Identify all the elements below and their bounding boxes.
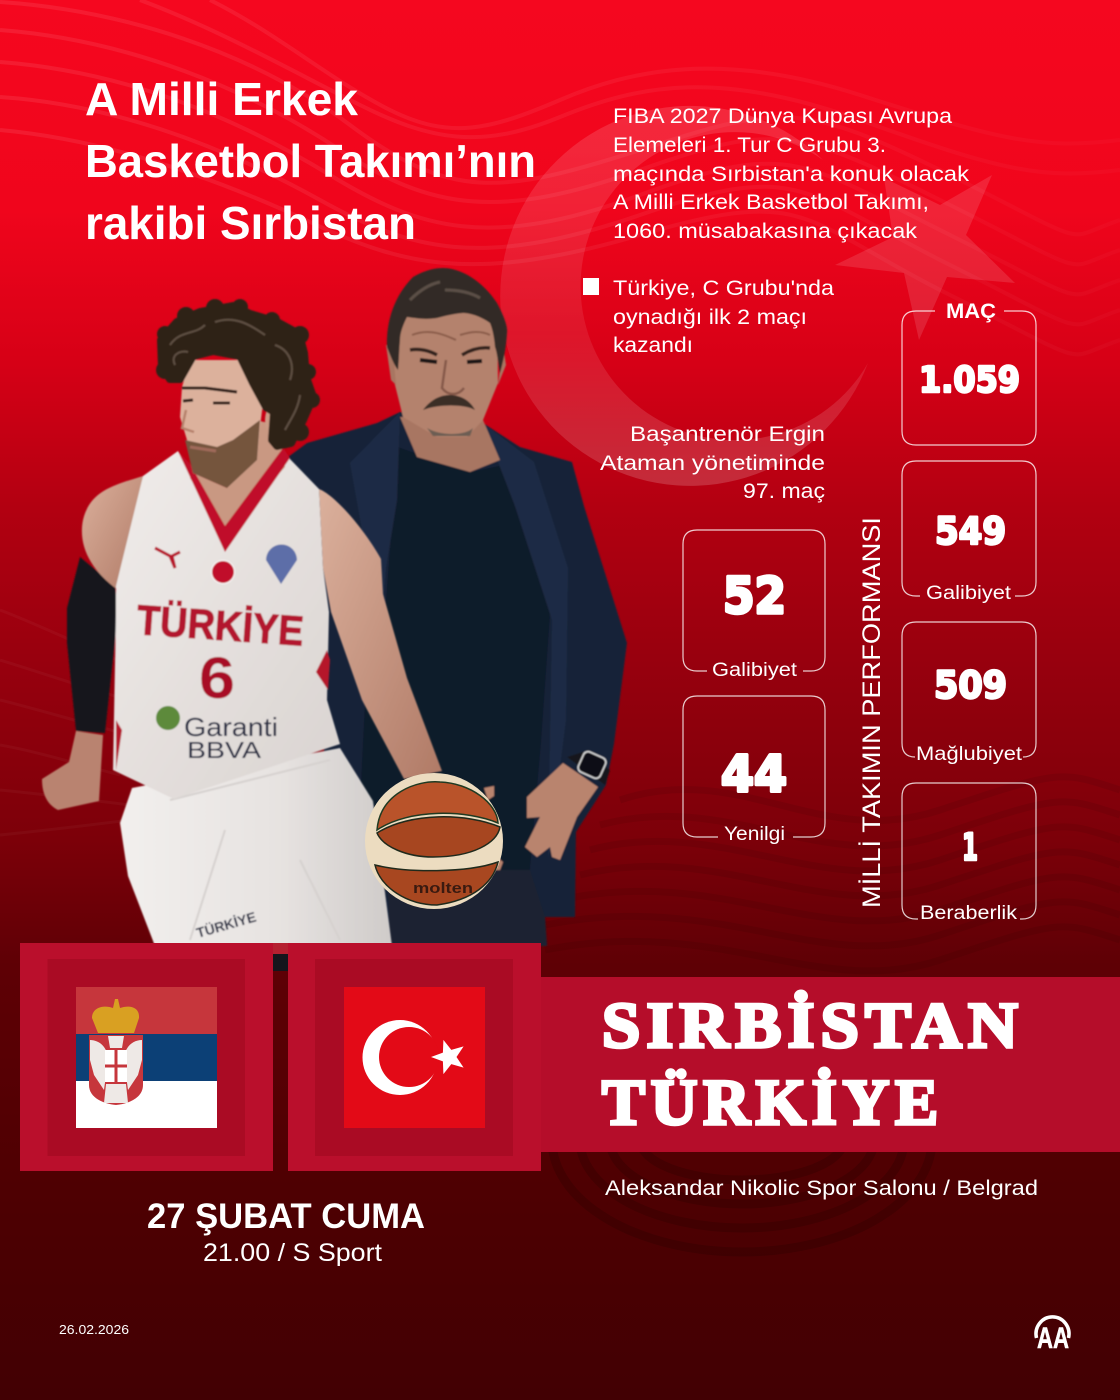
- chin stubble: [427, 428, 473, 436]
- stat card: wins: [902, 461, 1036, 604]
- jersey: [113, 451, 340, 799]
- panel: Serbia flag: [20, 943, 273, 1171]
- intro text: FIBA 2027 Dünya Kupası Avrupa: [613, 104, 952, 128]
- vertical heading: MİLLİ TAKIMIN PERFORMANSI: [857, 517, 886, 908]
- collar: [178, 448, 290, 552]
- coat of arms: [89, 999, 143, 1105]
- coach caption: [600, 422, 825, 503]
- intro text: Elemeleri 1. Tur C Grubu 3.: [613, 133, 886, 157]
- crescent watermark: [500, 106, 868, 486]
- match date: 27 ŞUBAT CUMA: [147, 1197, 425, 1236]
- watch: [567, 750, 610, 785]
- shirt: [360, 447, 551, 870]
- team names: SIRBİSTAN: [602, 990, 1024, 1062]
- brows: [410, 348, 490, 355]
- forehead lines: [412, 332, 490, 340]
- stat card: coach losses: 44: [721, 745, 787, 803]
- venue: Aleksandar Nikolic Spor Salonu / Belgrad: [605, 1176, 1038, 1200]
- match banner: TÜRKİYE: [602, 1067, 944, 1139]
- flag stripes: [76, 987, 217, 1128]
- shorts folds: [170, 760, 340, 940]
- stat card: wins: 549: [935, 510, 1006, 553]
- hair highlights: [410, 282, 480, 300]
- jacket: [288, 412, 627, 946]
- sleeve: [67, 557, 118, 733]
- stat card: coach wins: Galibiyet: [712, 660, 798, 681]
- stat card: losses: [902, 622, 1036, 765]
- flag field: [344, 987, 485, 1128]
- stat card: wins: Galibiyet: [926, 583, 1012, 604]
- right arm: [319, 489, 442, 779]
- puma logo: [155, 548, 180, 568]
- coach caption: Ataman yönetiminde: [600, 451, 825, 475]
- shorts sponsor: TÜRKİYE: [194, 909, 258, 941]
- publication date: 26.02.2026: [59, 1323, 129, 1337]
- nose: [442, 360, 464, 394]
- beard: [185, 420, 260, 488]
- neck: [400, 417, 500, 472]
- star: [431, 1040, 464, 1074]
- stat card: draws: Beraberlik: [920, 903, 1018, 924]
- title: A Milli Erkek: [85, 73, 358, 125]
- face: [180, 360, 263, 487]
- stat card: matches: [902, 300, 1036, 445]
- agency logo: [1036, 1317, 1069, 1355]
- hair: [156, 299, 320, 446]
- sponsor text: Garanti: [184, 712, 278, 742]
- trousers: [387, 870, 547, 946]
- stat card: draws: 1: [962, 826, 978, 869]
- eyes: [420, 360, 482, 362]
- mouth: [190, 447, 216, 451]
- face: [393, 305, 498, 437]
- moustache: [423, 395, 475, 410]
- stat card: coach losses: [683, 696, 825, 845]
- player: BBVA: [187, 737, 262, 763]
- coach caption: Başantrenör Ergin: [630, 422, 825, 446]
- jersey number: 6: [199, 646, 235, 711]
- federation badge: [212, 560, 234, 584]
- bullet text: Türkiye, C Grubu'nda: [613, 276, 834, 300]
- match banner: [541, 977, 1120, 1152]
- cup badge: [266, 544, 297, 584]
- nose: [182, 410, 194, 432]
- intro text: [613, 104, 969, 243]
- intro text: A Milli Erkek Basketbol Takımı,: [613, 190, 929, 214]
- stat card: losses: Mağlubiyet: [916, 744, 1023, 765]
- intro text: 1060. müsabakasına çıkacak: [613, 219, 917, 243]
- basketball: molten: [413, 880, 473, 897]
- hair: [387, 268, 507, 373]
- stat card: coach wins: 52: [723, 567, 786, 625]
- basketball: [365, 773, 503, 909]
- jersey name: TÜRKİYE: [135, 596, 305, 655]
- ears: [386, 345, 506, 385]
- eyes and brows: [182, 388, 237, 403]
- left hand: [42, 731, 103, 810]
- fingertips behind ball: [484, 786, 503, 870]
- stat card: losses: 509: [934, 664, 1007, 707]
- title: Basketbol Takımı’nın: [85, 135, 536, 187]
- panel: Turkey flag: [288, 943, 541, 1171]
- title: rakibi Sırbistan: [85, 197, 416, 249]
- match time and channel: 21.00 / S Sport: [203, 1239, 382, 1267]
- agency logo: AA: [1037, 1322, 1069, 1355]
- stat card: matches: 1.059: [919, 360, 1020, 401]
- ear: [265, 403, 287, 437]
- player: [42, 299, 442, 946]
- coach: [288, 268, 627, 946]
- bullet text: [583, 276, 834, 357]
- coach caption: 97. maç: [743, 479, 825, 503]
- stat card: coach losses: Yenilgi: [724, 824, 785, 845]
- stat card: draws: [902, 783, 1036, 924]
- lapels: [350, 412, 568, 860]
- intro text: maçında Sırbistan'a konuk olacak: [613, 162, 969, 186]
- neck: [190, 420, 285, 535]
- sponsor logo: [156, 706, 180, 730]
- star watermark: [835, 175, 1015, 340]
- crescent: [362, 1020, 439, 1095]
- jersey side trim: [116, 650, 330, 770]
- stat card: coach wins: [683, 530, 825, 681]
- shorts: [120, 748, 392, 946]
- bullet text: kazandı: [613, 333, 693, 357]
- stat card: matches: MAÇ: [946, 300, 996, 323]
- left shoulder: [82, 476, 143, 590]
- bullet text: oynadığı ilk 2 maçı: [613, 305, 807, 329]
- hand: [525, 763, 598, 860]
- small gap detail under player: [272, 943, 288, 971]
- title: [85, 73, 536, 249]
